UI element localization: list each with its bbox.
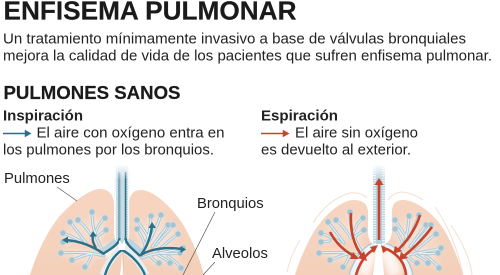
label: Bronquios [183, 196, 264, 275]
light bronchi branches [319, 212, 441, 268]
arrow heads [62, 222, 186, 253]
inspiration legend: El aire con oxígeno entra en [36, 124, 224, 142]
light bronchi branches [61, 212, 183, 268]
intro text [3, 30, 492, 64]
expiration legend: Espiración [261, 108, 338, 124]
red air arrows [330, 183, 432, 275]
inner glow [319, 212, 441, 275]
inspiration legend [3, 108, 224, 158]
diagram: lungs during expiration [287, 164, 472, 275]
intro text: Un tratamiento mínimamente invasivo a base de válvulas bronquiales [3, 30, 466, 48]
heart notch line [122, 252, 124, 275]
expiration legend: El aire sin oxígeno [295, 124, 418, 142]
arrow: inspiration [3, 131, 30, 136]
label: Alveolos [203, 246, 268, 275]
label: Bronquios: Bronquios [197, 196, 264, 212]
inner glow [61, 212, 183, 268]
label: Pulmones: Pulmones [4, 171, 70, 187]
trachea [370, 164, 388, 244]
alveoli clusters [316, 209, 444, 271]
lungs [30, 189, 204, 275]
main bronchi [352, 246, 410, 275]
arrow: expiration [261, 131, 288, 136]
expiration legend [261, 108, 418, 158]
main bronchi [65, 226, 182, 275]
inspiration legend: Inspiración [3, 108, 83, 124]
trachea [113, 164, 131, 244]
diagram: lungs during inspiration [30, 164, 204, 275]
section heading: PULMONES SANOS [4, 82, 180, 103]
label: Alveolos: Alveolos [212, 246, 268, 262]
intro text: mejora la calidad de vida de los pacientes que sufren enfisema pulmonar. [3, 48, 492, 64]
inspiration legend: los pulmones por los bronquios. [3, 142, 214, 158]
lungs [295, 200, 463, 275]
label: Pulmones [4, 171, 77, 201]
expiration legend: es devuelto al exterior. [261, 142, 411, 158]
alveoli clusters [58, 209, 186, 271]
faint chest outline [287, 192, 472, 275]
red arrow heads [350, 178, 408, 261]
